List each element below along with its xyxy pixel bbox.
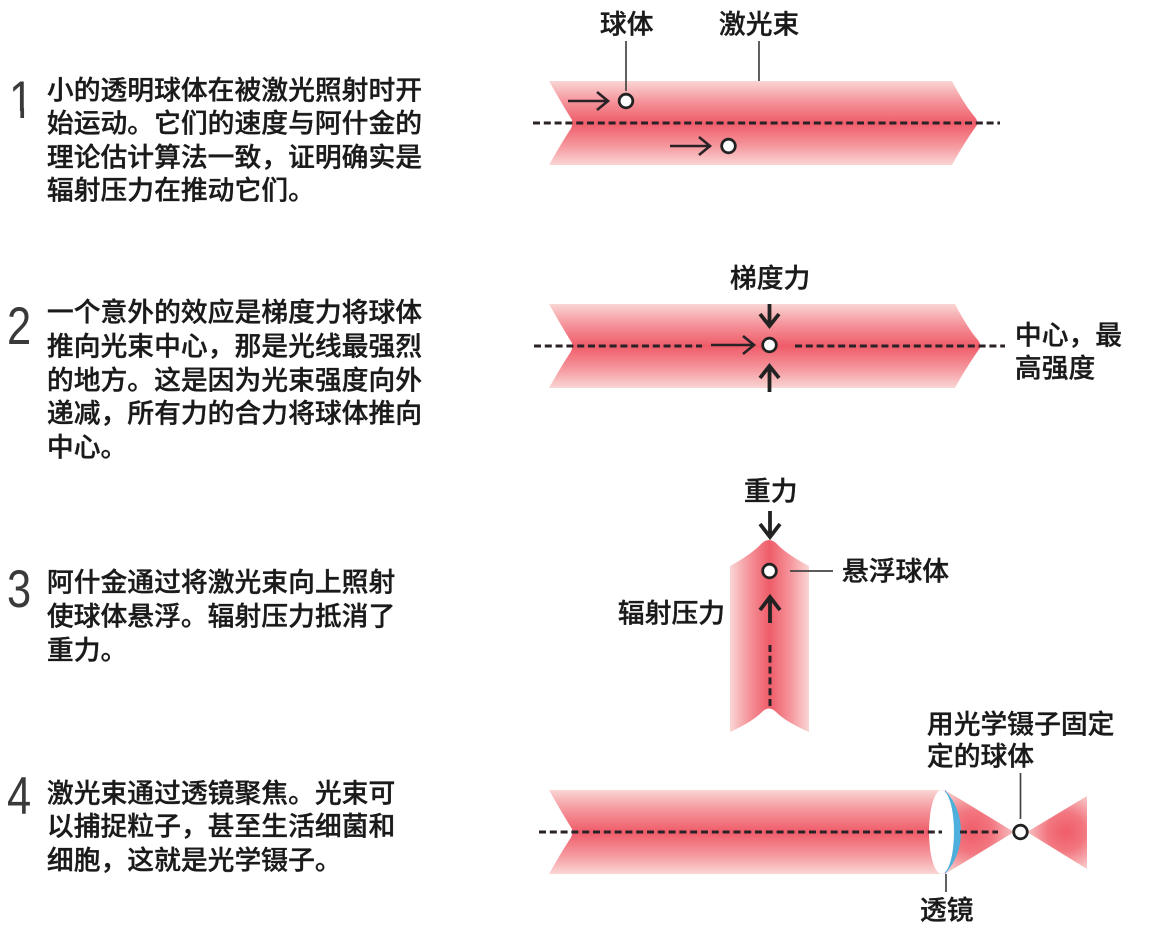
diagram: optical tweezers [539,710,1114,926]
diagram: levitation [618,476,949,732]
arrow: down force [760,304,779,326]
text block: step 3: 使球体悬浮。辐射压力抵消了 [47,602,395,632]
arrow: lower sphere motion [670,137,710,155]
arrow: gravity [760,511,780,537]
leader: laser beam [758,41,760,81]
text block: step 2: 中心。 [47,432,127,462]
panel: step 3 [7,560,395,666]
step number 2: 2 [7,297,31,356]
step number 1 [13,82,24,118]
text block: step 2: 的地方。这是因为光束强度向外 [47,366,422,396]
sphere: upper [619,94,633,108]
text block: step 4: 以捕捉粒子，甚至生活细菌和 [47,812,395,842]
label: levitated sphere: 悬浮球体 [842,556,949,586]
diagram: laser beam with moving spheres [533,10,1000,165]
label: trapped sphere: 用光学镊子固定 [927,710,1114,740]
laser beam [549,304,980,388]
vertical laser beam [730,540,809,732]
label: gradient force: 梯度力 [730,264,810,294]
arrow: beam direction [711,336,754,354]
label: sphere: 球体 [600,10,654,40]
arrow: up force [760,366,779,392]
step number 4: 4 [7,767,31,826]
label: gravity: 重力 [744,476,797,506]
lens blue edge [945,790,961,874]
text block: step 2: 一个意外的效应是梯度力将球体 [47,298,422,328]
text block: step 2: 推向光束中心，那是光线最强烈 [47,332,422,362]
diverging cone [1027,796,1087,869]
leader: lens [945,874,947,892]
leader: levitated sphere [790,570,833,572]
laser beam [549,81,977,165]
arrow: radiation pressure [760,597,780,623]
panel: step 2 [7,297,422,462]
converging cone [945,790,1014,874]
text block: step 4: 细胞，这就是光学镊子。 [47,846,342,876]
beam axis [768,645,772,707]
sphere [1014,825,1027,839]
diagram: gradient force [534,264,1122,392]
leader: sphere [625,41,627,91]
text block: step 2: 递减，所有力的合力将球体推向 [47,398,422,428]
lens [929,790,961,874]
beam axis right [795,344,1005,348]
label: centre highest intensity: 高强度 [1015,354,1095,384]
text block: step 1: 小的透明球体在被激光照射时开 [47,76,422,106]
label: trapped sphere: 定的球体 [927,742,1034,772]
text block: step 4: 激光束通过透镜聚焦。光束可 [47,778,395,808]
lens body [929,790,954,874]
text block: step 1: 始运动。它们的速度与阿什金的 [47,108,422,138]
beam axis right [960,830,998,834]
label: lens: 透镜 [920,896,974,926]
text block: step 3: 重力。 [47,636,127,666]
label: radiation pressure: 辐射压力 [618,598,725,628]
beam axis left [534,344,702,348]
label: laser beam: 激光束 [719,10,799,40]
sphere [763,338,776,352]
arrow: upper sphere motion [568,92,608,110]
panel: step 4 [7,767,395,876]
beam axis left [539,830,942,834]
step number 3: 3 [7,560,31,619]
step number 1: 1 [9,71,33,130]
laser beam [549,790,946,874]
panel: step 1 [9,71,422,206]
label: centre highest intensity: 中心，最 [1015,320,1122,350]
text block: step 1: 辐射压力在推动它们。 [47,176,315,206]
leader: trapped sphere [1020,773,1022,819]
text block: step 1: 理论估计算法一致，证明确实是 [47,142,422,172]
sphere: lower [722,139,735,153]
beam axis [533,122,1000,124]
text block: step 3: 阿什金通过将激光束向上照射 [47,568,395,598]
sphere [763,564,776,578]
